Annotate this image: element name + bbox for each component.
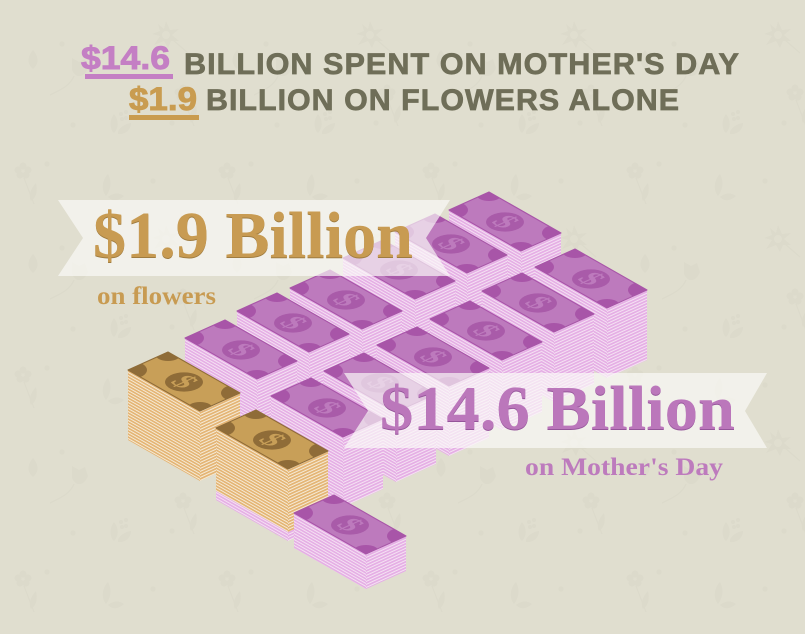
- title: [81, 40, 740, 120]
- gold stack right: $: [251, 429, 294, 450]
- short purple stack front: $: [329, 514, 372, 535]
- purple stack front row 2: [475, 268, 601, 402]
- gold stack right: [209, 405, 335, 532]
- title line: 1.9 billion on flowers: BILLION ON FLOWERS ALONE: [206, 84, 680, 117]
- purple stack front row 6: [264, 373, 390, 507]
- gold stack left: [121, 347, 247, 481]
- title line: 1.9 billion on flowers: $1.9: [129, 81, 197, 117]
- purple stack front row 5: $: [359, 372, 402, 393]
- purple stack back row 3: [336, 235, 462, 369]
- purple stack back row 5: $: [272, 312, 315, 333]
- purple stack back row 6: [178, 315, 304, 449]
- purple stack front row 3: $: [465, 320, 508, 341]
- purple stack back row 6: $: [220, 339, 263, 360]
- purple stack back row 4: [283, 265, 409, 399]
- purple stack back row 2: $: [430, 233, 473, 254]
- purple stack back row 1: [442, 187, 568, 321]
- caption: on flowers: on flowers: [97, 283, 216, 310]
- purple stack front row 2: $: [517, 292, 560, 313]
- purple stack back row 5: [230, 288, 356, 422]
- title line: 14.6 billion spent: $14.6: [81, 40, 170, 76]
- money stacks illustration: [121, 187, 654, 589]
- purple stack back row 2: [388, 209, 514, 343]
- purple stack front row 3: [423, 296, 549, 430]
- purple stack under gold: [216, 430, 328, 541]
- purple stack front row 5: [317, 348, 443, 482]
- ribbon: 1.9 billion on flowers: $1.9 Billion: [93, 199, 413, 272]
- title line: 14.6 billion spent: BILLION SPENT ON MOTHER'S DAY: [184, 48, 740, 81]
- purple stack front row 4: [370, 322, 496, 456]
- purple stack front row 1: $: [570, 268, 613, 289]
- short purple stack front: [287, 490, 413, 589]
- gold stack left: $: [163, 371, 206, 392]
- caption: on mothers day: on Mother's Day: [525, 454, 724, 481]
- purple stack back row 1: $: [484, 211, 527, 232]
- purple stack front row 6: $: [306, 397, 349, 418]
- purple stack front row 4: $: [412, 346, 455, 367]
- purple stack front row 1: [528, 244, 654, 378]
- purple stack back row 4: $: [325, 289, 368, 310]
- ribbon: 14.6 billion on mothers day: $14.6 Billion: [380, 375, 735, 443]
- purple stack back row 3: $: [378, 259, 421, 280]
- title line: 14.6 billion spent: [81, 40, 740, 81]
